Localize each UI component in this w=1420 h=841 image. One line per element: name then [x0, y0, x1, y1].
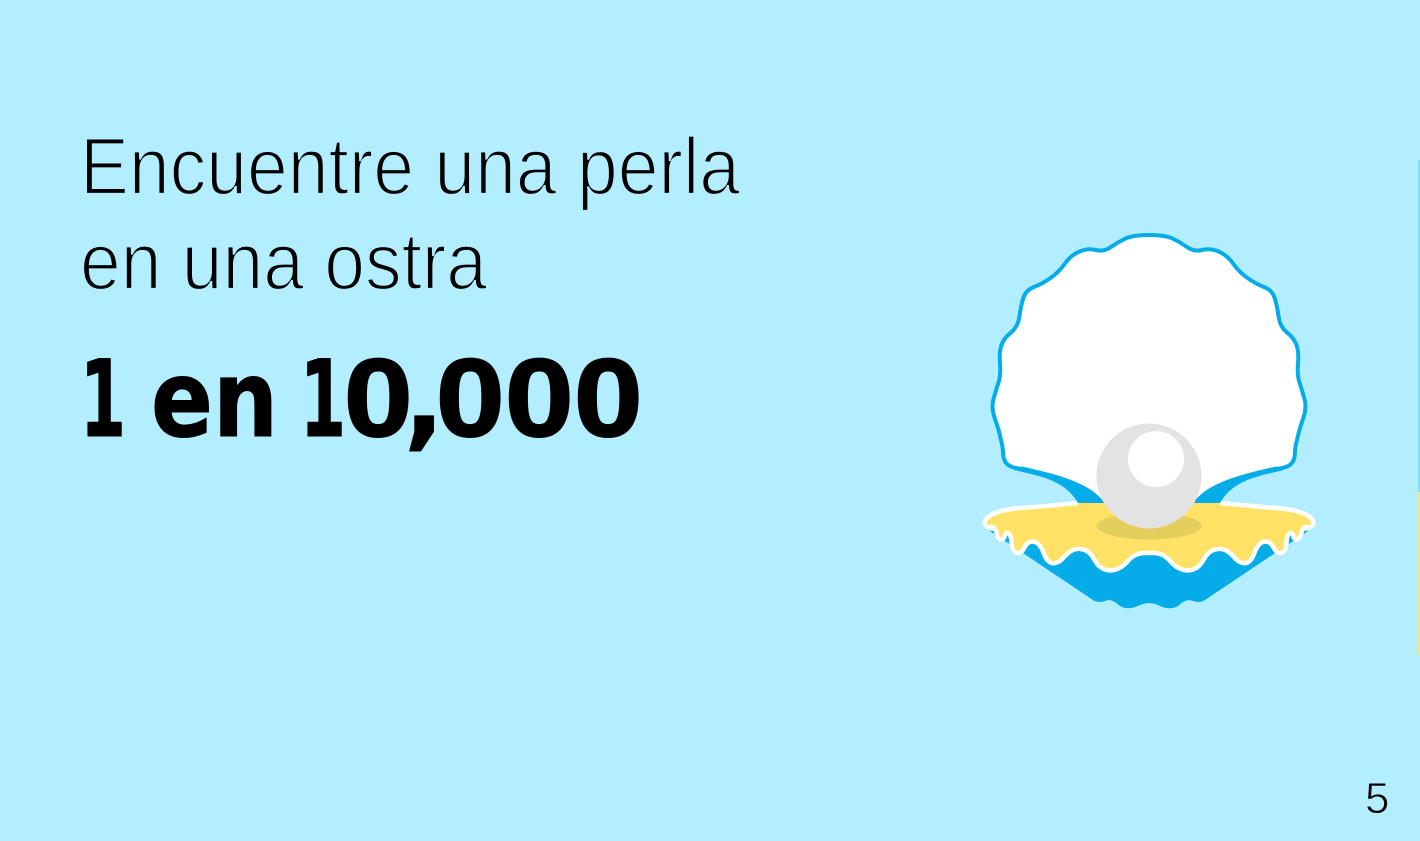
odds statistic: 0: [436, 336, 505, 460]
odds statistic: 0: [574, 336, 643, 460]
pearl: [1096, 424, 1202, 528]
edge strip: blue: [1418, 160, 1420, 492]
pearl highlight: [1128, 431, 1184, 487]
page number: 5: [1365, 774, 1389, 823]
oyster upper shell: [993, 235, 1305, 503]
icon: oyster with pearl: [985, 235, 1313, 608]
odds statistic: 1: [300, 338, 346, 461]
odds statistic: en: [151, 338, 278, 461]
edge strip: yellow: [1418, 492, 1420, 655]
pearl shadow: [1096, 512, 1202, 540]
odds statistic: [80, 336, 643, 461]
odds statistic: ,: [404, 338, 444, 461]
heading: find a pearl in an oyster: en una ostra: [80, 217, 488, 307]
oyster yellow mantle: [985, 503, 1313, 570]
infographic slide: [84, 136, 1420, 813]
heading: find a pearl in an oyster: [80, 122, 741, 307]
oyster lower shell: [990, 531, 1308, 608]
odds statistic: 0: [344, 336, 413, 460]
heading: find a pearl in an oyster: Encuentre una perla: [80, 122, 741, 212]
odds statistic: 0: [505, 336, 574, 460]
odds statistic: 1: [80, 338, 126, 461]
